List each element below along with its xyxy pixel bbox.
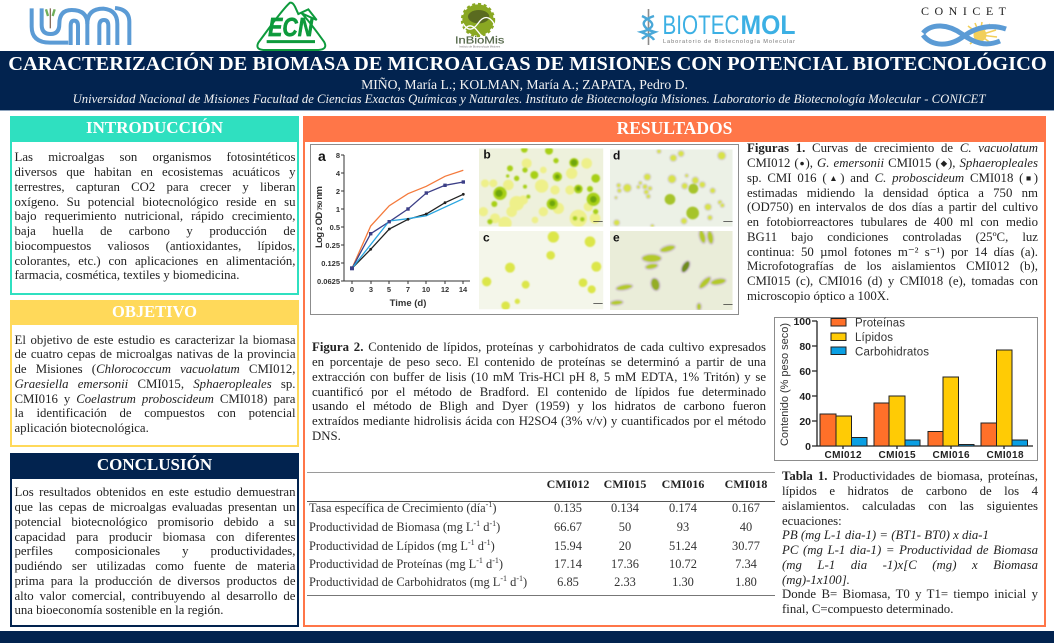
text: figura 2 caption: extracción con buffer de lisis (10 mM Tris-HCl pH 8, 5 mM EDTA, 1% Tritón) y se [312, 370, 766, 384]
heading: resultados [303, 116, 1046, 142]
table row: proteínas [309, 556, 757, 571]
text: objetivo [14, 333, 296, 435]
logo: InBioMis: InBioMis [455, 35, 504, 46]
table row: carbohidratos: 6.85 [557, 575, 579, 589]
text: introducción: bajo requerimiento nutricional, rápido crecimiento, [14, 209, 296, 223]
table row: biomasa [309, 519, 752, 534]
text: figuras 1 caption: sp. CMI 016 (▲) and C. proboscideum CMI018 (■) [747, 171, 1038, 185]
table row: tasa: 0.167 [732, 501, 760, 515]
table row: proteínas: 10.72 [669, 557, 697, 571]
chart: composition bar chart [774, 316, 1038, 461]
footer band [0, 631, 1054, 643]
text: figuras 1 caption: estimadas midiendo la densidad óptica a 750 nm [747, 186, 1038, 200]
table row: proteínas: 17.36 [611, 557, 639, 571]
panel: objetivo [10, 300, 299, 447]
table row: lípidos: 15.94 [554, 539, 582, 553]
chart: growth curves: 7 [406, 285, 410, 294]
text: introducción: biocompuestos valiosos (antioxidantes, lípidos, [14, 239, 296, 253]
text: objetivo: aplicación biotecnológica. [14, 421, 149, 435]
chart: growth curves: a [318, 148, 326, 164]
table row: biomasa: 66.67 [554, 520, 582, 534]
logo: CONICET: CONICET [921, 4, 1007, 18]
text: figuras 1 caption: BG11 bajo condiciones controladas (25ºC, luz [747, 230, 1038, 244]
panel: introducción [10, 116, 299, 295]
heading: objetivo: OBJETIVO [112, 302, 197, 321]
text: figura 2 caption: DNS. [312, 429, 341, 443]
chart: growth curves: 12 [441, 285, 449, 294]
text: figuras 1 caption: Microfotografías de los aislamientos CMI012 (b), [747, 259, 1038, 273]
text: objetivo: de Misiones (Chlorococcum vacuolatum CMI012, [14, 362, 296, 376]
logo: BIOTECMOL: Laboratorio de Biotecnología Molecular [663, 39, 795, 45]
text: figuras 1 caption: continua: 50 µmol fotones m⁻² s⁻¹) por 14 días (a). [747, 245, 1038, 259]
text: tabla 1 caption: PB (mg L-1 dia-1) = (BT1- BT0) x dia-1 [782, 528, 989, 542]
table row: proteínas: 7.34 [735, 557, 757, 571]
panel: conclusión [10, 453, 299, 627]
table row: proteínas: Productividad de Proteínas (mg L-1 d-1) [309, 556, 503, 571]
figure 1 frame [310, 144, 739, 315]
table row: biomasa: 40 [740, 520, 752, 534]
chart: composition bar chart: 20 [799, 416, 811, 428]
text: introducción [14, 150, 296, 282]
text: tabla 1 caption: ecuaciones: [782, 514, 842, 528]
text: tabla 1 caption: (mg)-1x100]. [782, 573, 850, 587]
micrograph e: e [613, 230, 620, 244]
text: conclusión [14, 485, 296, 617]
text: introducción: baja huella de carbono y producción de [14, 224, 296, 238]
chart: composition bar chart: 80 [799, 341, 811, 353]
table row: tasa: 0.134 [611, 501, 639, 515]
logo: CONICET [921, 4, 1007, 47]
text: conclusión: que las cepas de microalgas evaluadas presentan un [14, 500, 296, 514]
micrograph d: d [613, 148, 620, 162]
text: figura 2 caption: extraídos mediante hidrolisis ácida con H2SO4 (3% v/v) y cuantificados por el método [312, 414, 766, 428]
text: tabla 1 caption: Donde B= Biomasa, T0 y T1= tiempo inicial y [782, 587, 1038, 601]
chart: composition bar chart: 60 [799, 366, 811, 378]
micrograph b: b [483, 148, 491, 162]
chart: growth curves: 0.0625 [317, 277, 340, 286]
table row: lípidos: 51.24 [669, 539, 697, 553]
chart: composition bar chart: Proteínas [855, 318, 905, 330]
text: figura 2 caption: cuantificó por el método de Bradford. El contenido de lípidos fue determinado [312, 385, 766, 399]
chart: growth curves [314, 148, 470, 309]
text: figuras 1 caption: (OD750) en intervalos de dos días a partir del cultivo [747, 200, 1038, 214]
table header row: CMI018 [725, 477, 767, 491]
text: figuras 1 caption [747, 141, 1038, 303]
micrograph c: c [483, 230, 490, 244]
text: figuras 1 caption: microscopio óptico a 100X. [747, 289, 889, 303]
title: CARACTERIZACIÓN DE BIOMASA DE MICROALGAS DE MISIONES CON POTENCIAL BIOTECNOLÓGICO [8, 52, 1047, 74]
text: objetivo: la identificación de compuestos con potencial [14, 406, 296, 420]
chart: growth curves: 8 [336, 151, 340, 160]
chart: growth curves: 3 [369, 285, 373, 294]
logo: BIOTECMOL [636, 9, 796, 45]
text: objetivo: Graesiella emersonii CMI015, Sphaeropleales sp. [14, 377, 296, 391]
table: productividades [307, 472, 775, 596]
table row: carbohidratos [309, 574, 757, 589]
table row: lípidos: 20 [619, 539, 631, 553]
table header row [547, 477, 767, 491]
text: conclusión: pudiéndo ser utilizadas como fuente de materia [14, 559, 296, 573]
table row: tasa [309, 500, 760, 515]
text: objetivo: El objetivo de este estudio es caracterizar la biomasa [14, 333, 296, 347]
chart: growth curves: Time (d) [390, 298, 426, 309]
text: introducción: terrestres, capturan CO2 para crecer y liberan [14, 180, 296, 194]
text: conclusión: capacidad para producir biomasa con diferentes [14, 530, 296, 544]
micrograph e [610, 229, 733, 311]
chart: growth curves: 5 [387, 285, 391, 294]
text: introducción: farmacia, cosmética, textiles y biomedicina. [14, 268, 239, 282]
heading: objetivo [10, 300, 299, 325]
panel: resultados [303, 116, 1046, 627]
table header row: CMI016 [662, 477, 704, 491]
authors: MIÑO, María L.; KOLMAN, María A.; ZAPATA, Pedro D. [361, 77, 688, 92]
micrographs b c d e [479, 148, 733, 310]
text: conclusión: perfiles composicionales y productividades, [14, 544, 296, 558]
text: introducción: colorantes, etc.) con aplicaciones en alimentación, [14, 254, 296, 268]
text: figura 2 caption: usando el método de Bligh and Dyer (1959) y los hidratos de carbono fueron [312, 399, 766, 413]
chart: composition bar chart: Lípidos [855, 332, 893, 344]
heading: introducción [10, 116, 299, 142]
chart: composition bar chart: CMI015 [878, 450, 916, 461]
micrograph d [610, 148, 733, 228]
text: conclusión: una bioeconomía sostenible en la región. [14, 603, 223, 617]
table row: tasa: Tasa específica de Crecimiento (día-1) [309, 500, 496, 515]
header band [0, 51, 1054, 111]
text: figuras 1 caption: CMI015 (c), CMI016 (d) y CMI018 (e), tomadas con [747, 274, 1038, 288]
chart: growth curves: 2 [336, 187, 340, 196]
text: figuras 1 caption: Figuras 1. Curvas de crecimiento de C. vacuolatum [747, 141, 1038, 155]
heading: conclusión: CONCLUSIÓN [97, 455, 212, 474]
text: tabla 1 caption [782, 469, 1038, 616]
logo: InBioMis: Instituto de Biotecnología Misiones [459, 45, 501, 49]
chart: composition bar chart: 0 [805, 441, 811, 453]
micrograph c [479, 230, 603, 310]
text: conclusión: alto valor comercial, contribuyendo al desarrollo de [14, 589, 296, 603]
text: objetivo: CMI016 y Coelastrum proboscideum CMI018) para [14, 392, 295, 406]
table row: biomasa: 50 [619, 520, 631, 534]
text: figura 2 caption: en porcentaje de peso seco. El contenido de proteínas se determinó a partir de una [312, 355, 766, 369]
chart: composition bar chart: 100 [793, 316, 811, 328]
table header row: CMI015 [604, 477, 646, 491]
table row: lípidos: 30.77 [732, 539, 760, 553]
logo: ECN: ECN [268, 12, 314, 42]
text: introducción: diversos que habitan en ecosistemas acuáticos y [14, 165, 296, 179]
table row: carbohidratos: Productividad de Carbohidratos (mg L-1 d-1) [309, 574, 527, 589]
heading: resultados: RESULTADOS [617, 118, 732, 138]
chart: growth curves: 0.125 [321, 259, 340, 268]
heading: introducción: INTRODUCCIÓN [86, 118, 223, 137]
chart: growth curves: Log 2 OD 750 nm [314, 186, 325, 248]
text: introducción: oxígeno. Su potencial biotecnológico reside en su [14, 195, 296, 209]
table row: carbohidratos: 1.80 [735, 575, 757, 589]
table row: biomasa: 93 [677, 520, 689, 534]
table row: proteínas: 17.14 [554, 557, 582, 571]
table row: lípidos: Productividad de Lípidos (mg L-1 d-1) [309, 538, 495, 553]
text: conclusión: prima para la producción de diversos productos de [14, 574, 296, 588]
text: conclusión: potencial biotecnológico promisorio debido a su [14, 515, 296, 529]
chart: growth curves: 4 [336, 169, 341, 178]
logo: UNaM [30, 6, 132, 45]
chart: composition bar chart: CMI016 [932, 450, 970, 461]
chart: growth curves: 0 [350, 285, 354, 294]
table row: tasa: 0.135 [554, 501, 582, 515]
chart: growth curves: 0.5 [330, 223, 340, 232]
text: introducción: Las microalgas son organismos fotosintéticos [14, 150, 296, 164]
table row: carbohidratos: 2.33 [614, 575, 636, 589]
text: figura 2 caption: Figura 2. Contenido de lípidos, proteínas y carbohidratos de cada cultivo expresados [312, 340, 766, 354]
text: tabla 1 caption: (mg L-1 dia -1)x[C (mg) x Biomasa [782, 558, 1038, 572]
text: figuras 1 caption: en fotobiorreactores tubulares de 400 ml con medio [747, 215, 1038, 229]
text: tabla 1 caption: PC (mg L-1 dia-1) = Productividad de Biomasa [782, 543, 1038, 557]
table header row: CMI012 [547, 477, 589, 491]
table row: tasa: 0.174 [669, 501, 697, 515]
text: figuras 1 caption: CMI012 (●), G. emersonii CMI015 (◆), Sphaeropleales [747, 156, 1038, 170]
chart: growth curves: 0.25 [325, 241, 340, 250]
table row: lípidos [309, 538, 760, 553]
chart: composition bar chart: CMI012 [824, 450, 862, 461]
logo: ECN [256, 2, 326, 51]
logo: BIOTECMOL: BIOTEC [662, 10, 740, 40]
text: objetivo: de cuatro cepas de microalgas nativas de la provincia [14, 347, 296, 361]
chart: growth curves: 14 [459, 285, 468, 294]
chart: composition bar chart: 40 [799, 391, 811, 403]
heading: conclusión [10, 453, 299, 479]
chart: growth curves: 10 [422, 285, 430, 294]
table row: biomasa: Productividad de Biomasa (mg L-1 d-1) [309, 519, 500, 534]
logo: BIOTECMOL: MOL [740, 10, 796, 40]
text: tabla 1 caption: aislamientos. calculadas con las siguientes [782, 499, 1038, 513]
table row: carbohidratos: 1.30 [672, 575, 694, 589]
text: tabla 1 caption: final, C=compuesto determinado. [782, 602, 953, 616]
chart: composition bar chart: Contenido (% peso seco) [779, 323, 791, 446]
logo: InBioMis [455, 2, 504, 49]
micrograph b [479, 146, 603, 230]
text: conclusión: Los resultados obtenidos en este estudio demuestran [14, 485, 296, 499]
affiliation: Universidad Nacional de Misiones Facultad de Ciencias Exactas Químicas y Naturales. Instituto de Biotecnología Misiones. Laboratorio de Biotecnología Molecular - CONICET [73, 92, 985, 106]
text: tabla 1 caption: Tabla 1. Productividades de biomasa, proteínas, [782, 469, 1038, 483]
chart: composition bar chart: CMI018 [986, 450, 1024, 461]
text: tabla 1 caption: lípidos e hidratos de carbono de los 4 [782, 484, 1038, 498]
chart: composition bar chart: Carbohidratos [855, 346, 929, 358]
text: figura 2 caption [312, 340, 766, 443]
chart: growth curves: 1 [336, 205, 340, 214]
